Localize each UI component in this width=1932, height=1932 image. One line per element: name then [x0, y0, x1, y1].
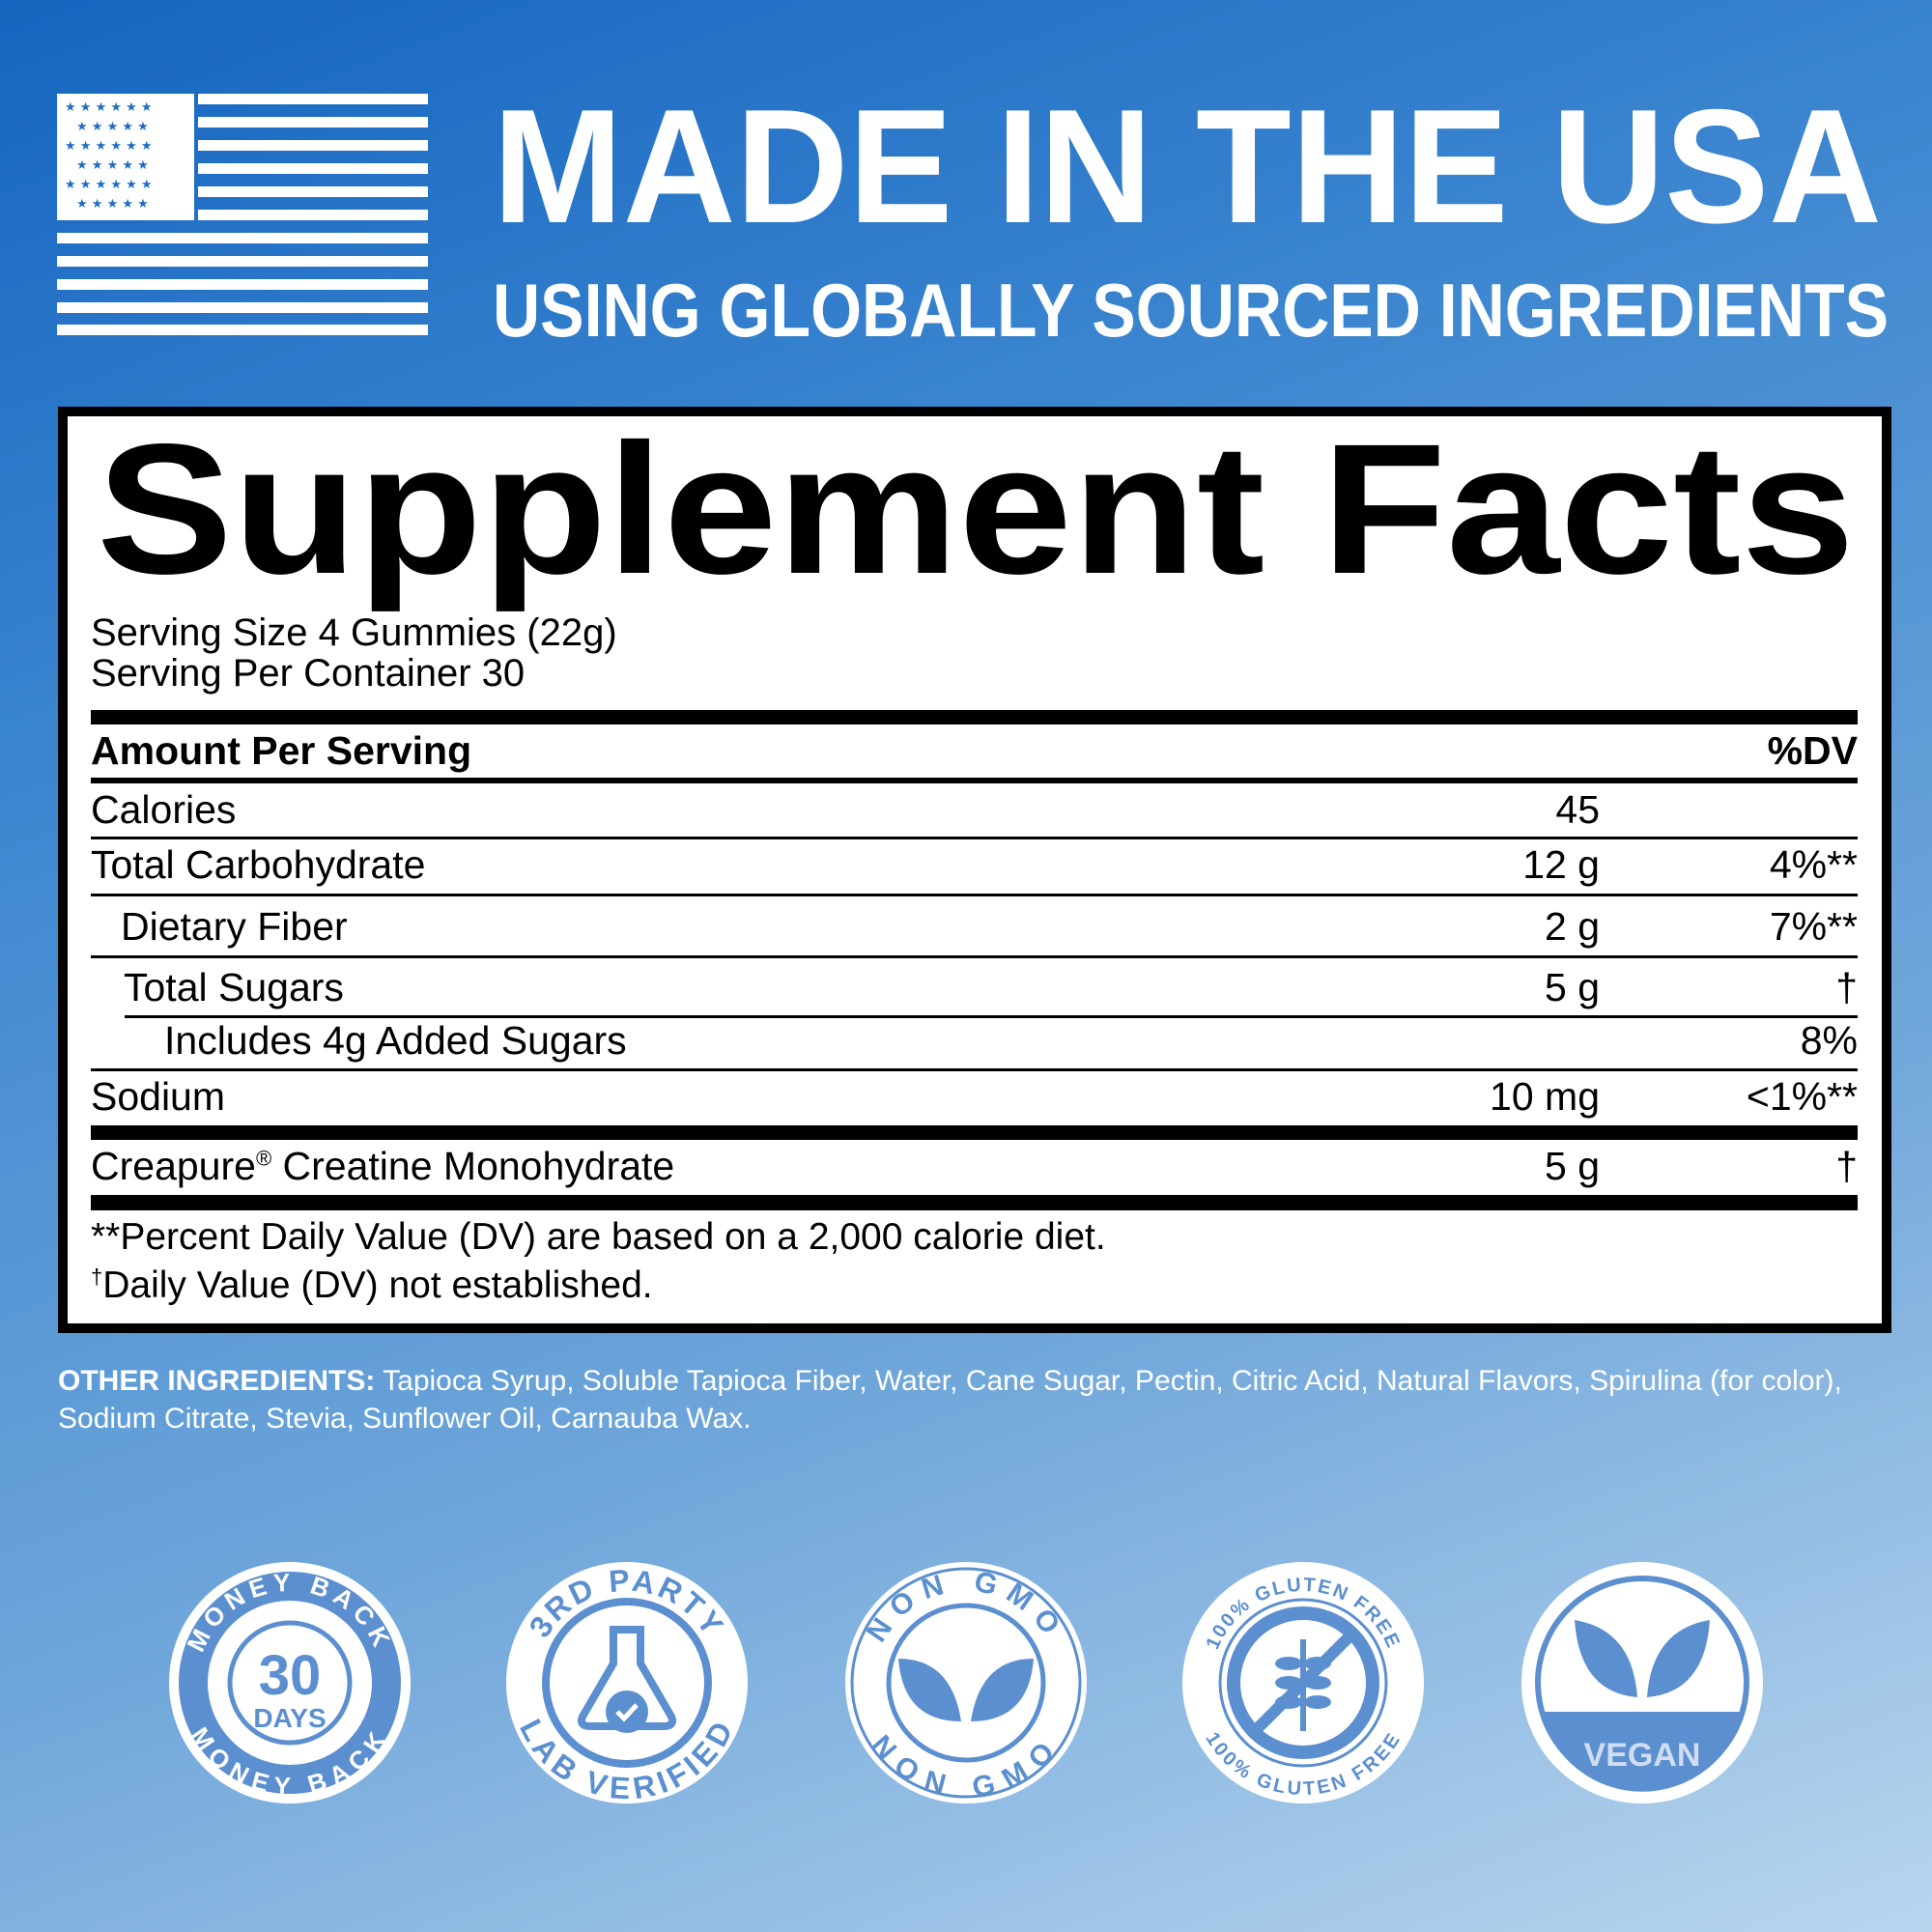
footnotes [91, 1216, 1106, 1306]
row: sodium: <1%** [1747, 1074, 1858, 1119]
badge: 30 days money back: DAYS [253, 1703, 327, 1733]
row: added sugars: 8% [1801, 1018, 1858, 1063]
row: carbohydrate: 4%** [1770, 842, 1858, 887]
row: carbohydrate: Total Carbohydrate [91, 842, 425, 887]
title [493, 75, 1889, 353]
row: fiber: 7%** [1770, 904, 1858, 949]
heading: Supplement Facts: Supplement Facts [97, 405, 1855, 612]
panel: supplement facts [58, 407, 1891, 1333]
badge: 3rd party lab verified: 3RD PARTY [530, 1570, 724, 1636]
row: carbohydrate: 12 g [1522, 842, 1600, 887]
other ingredients: OTHER INGREDIENTS: Tapioca Syrup, Soluble Tapioca Fiber, Water, Cane Sugar, Pectin, Citric Acid, Natural Flavors, Spirulina (for color), Sodium Citrate, Stevia, Sunflower Oil, Carnauba Wax. [58, 1365, 1842, 1435]
icon: US flag: ★ ★ ★ ★ ★ ★ [65, 178, 153, 192]
badges [169, 1562, 1763, 1804]
badge: 3rd party lab verified: LAB VERIFIED [520, 1719, 730, 1799]
row: fiber: 2 g [1545, 904, 1600, 949]
badge: vegan [1521, 1562, 1763, 1804]
badge: gluten free [1182, 1562, 1424, 1804]
row: calories [91, 787, 1600, 832]
row: calories: Calories [91, 787, 236, 832]
row: sugars: † [1835, 965, 1858, 1009]
row: creatine [91, 1144, 1858, 1188]
badge: vegan: VEGAN [1584, 1737, 1700, 1774]
badge: 30 days money back: 30 [259, 1644, 321, 1707]
icon: US flag: ★ ★ ★ ★ ★ [76, 120, 149, 134]
row: sugars [124, 965, 1858, 1009]
icon: US flag: ★ ★ ★ ★ ★ ★ [65, 100, 153, 115]
icon: US flag: ★ ★ ★ ★ ★ [76, 197, 149, 212]
row: header: Amount Per Serving [91, 728, 471, 773]
badge: non gmo: NON GMO [866, 1573, 1058, 1642]
row: header [91, 728, 1858, 773]
row: sodium: 10 mg [1490, 1074, 1600, 1119]
footnotes: **Percent Daily Value (DV) are based on a 2,000 calorie diet. [91, 1216, 1106, 1258]
row: fiber [121, 904, 1858, 949]
row: creatine: 5 g [1545, 1144, 1600, 1188]
row: added sugars: Includes 4g Added Sugars [164, 1018, 627, 1063]
row: sugars: Total Sugars [124, 965, 344, 1009]
row: calories: 45 [1555, 787, 1600, 832]
serving info [91, 611, 617, 695]
title: MADE IN THE USA [493, 75, 1882, 257]
row: sodium: Sodium [91, 1074, 225, 1119]
badge: 3rd party lab verified [506, 1562, 748, 1804]
badge: non gmo [845, 1562, 1087, 1804]
badge: 30 days money back: MONEY BACK [187, 1574, 390, 1652]
row: creatine: † [1835, 1144, 1858, 1188]
icon: US flag [57, 94, 428, 335]
badge: 30 days money back: MONEY BACK [191, 1726, 385, 1794]
row: carbohydrate [91, 842, 1858, 887]
row: creatine: Creapure® Creatine Monohydrate [91, 1144, 674, 1188]
row: sodium [91, 1074, 1858, 1119]
badge: non gmo: NON GMO [873, 1734, 1051, 1795]
row: sugars: 5 g [1545, 965, 1600, 1009]
badge: gluten free: 100% GLUTEN FREE [1206, 1733, 1400, 1795]
icon: US flag: ★ ★ ★ ★ ★ ★ [65, 139, 153, 154]
icon: US flag: ★ ★ ★ ★ ★ [76, 158, 149, 173]
badge: 30 days money back [169, 1562, 411, 1804]
footnotes: †Daily Value (DV) not established. [91, 1264, 653, 1306]
row: fiber: Dietary Fiber [121, 904, 348, 949]
serving info: Serving Size 4 Gummies (22g) [91, 611, 617, 654]
badge: gluten free: 100% GLUTEN FREE [1207, 1577, 1401, 1650]
row: added sugars [164, 1018, 1858, 1063]
row: header: %DV [1768, 728, 1858, 773]
serving info: Serving Per Container 30 [91, 652, 525, 695]
